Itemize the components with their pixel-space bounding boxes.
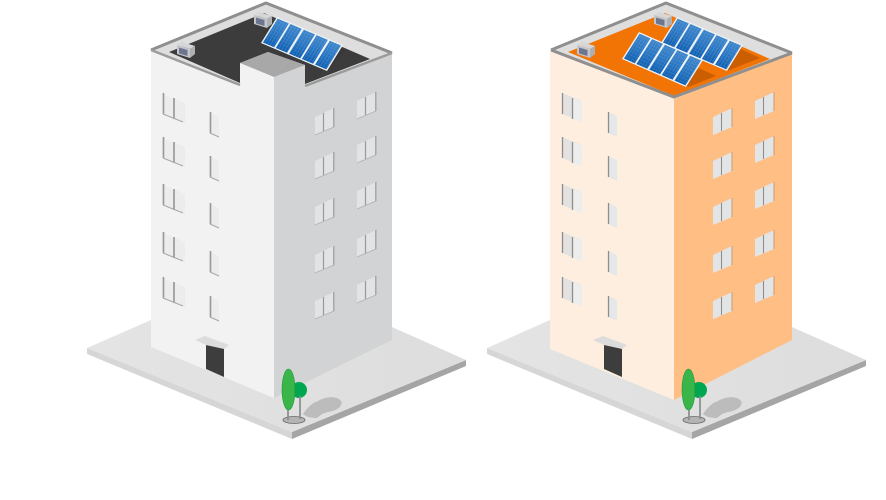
roof: parapet and dark surface — [151, 2, 392, 87]
wall: left face orange building — [550, 50, 674, 400]
tree orange building — [682, 369, 742, 424]
wall: right face orange building — [674, 53, 792, 400]
roof: parapet and orange surface — [551, 2, 792, 99]
solar array front — [622, 32, 716, 87]
building: white with small solar array — [87, 2, 466, 439]
ground plate right — [487, 320, 866, 439]
ac unit right a — [577, 42, 595, 58]
door left — [195, 336, 229, 377]
windows orange building — [562, 92, 774, 321]
tree left — [282, 369, 342, 424]
ac unit left a — [177, 42, 195, 58]
ac unit left b — [254, 12, 272, 28]
ac unit right b — [654, 12, 672, 28]
stairwell top — [240, 52, 305, 77]
wall: right face — [274, 53, 392, 398]
solar array rear — [661, 17, 760, 71]
ground plate left — [87, 320, 466, 439]
windows left building — [163, 92, 376, 321]
solar array left — [261, 17, 345, 71]
wall: left face — [151, 50, 274, 398]
building: orange with two solar arrays — [487, 2, 866, 439]
door orange building — [593, 336, 627, 377]
